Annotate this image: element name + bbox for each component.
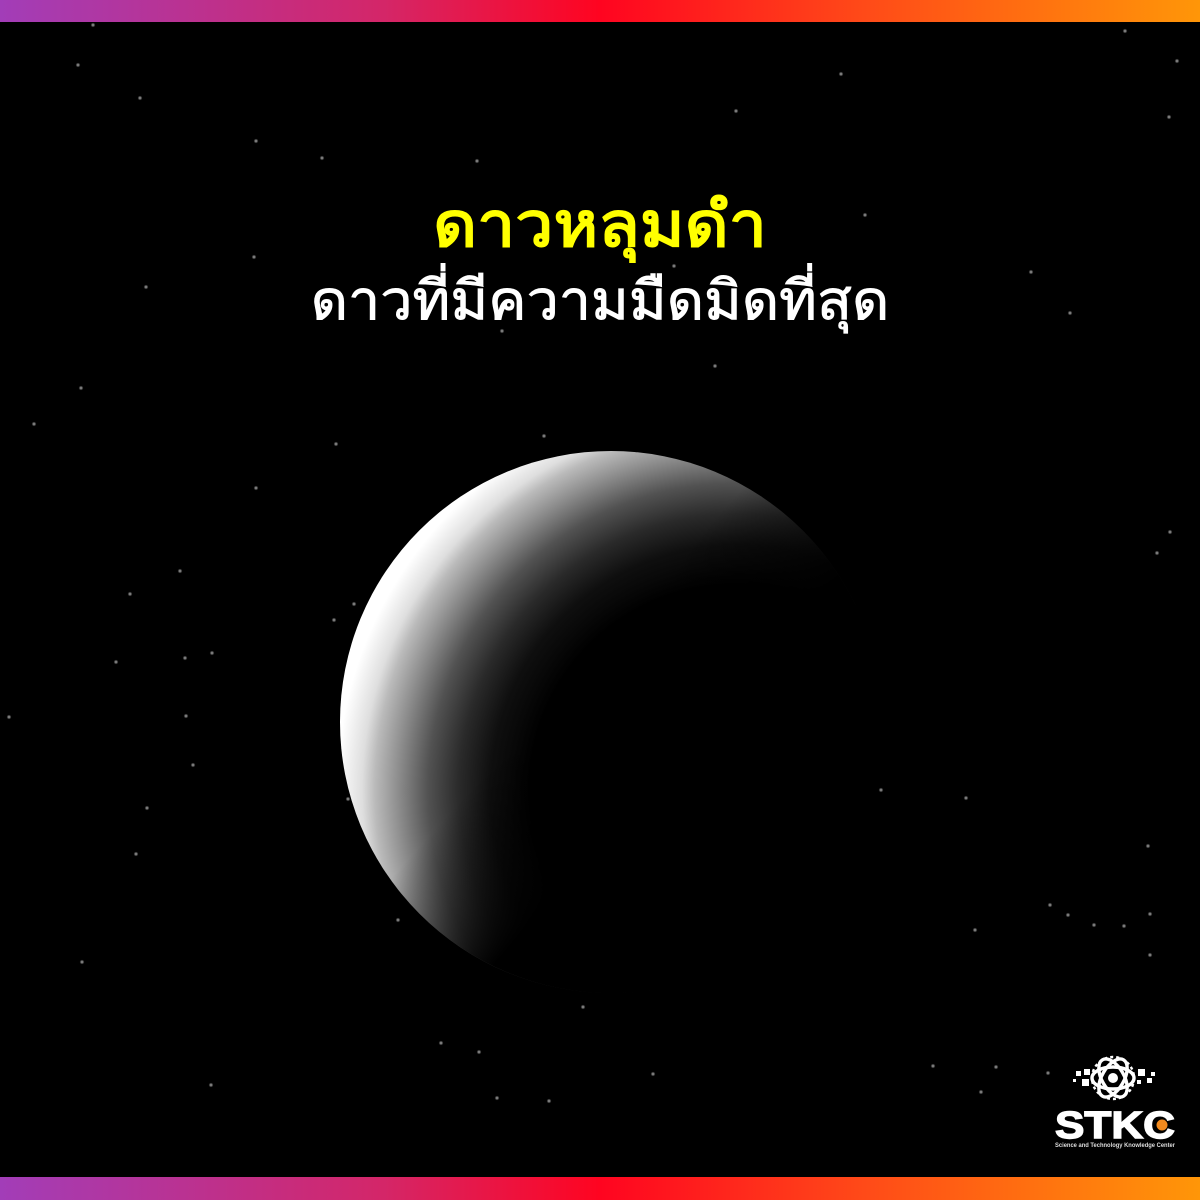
logo wordmark: STKC — [1055, 1105, 1175, 1147]
logo: STKC — [1055, 1054, 1176, 1149]
logo icon: atom mark — [1073, 1054, 1155, 1102]
top gradient bar — [0, 0, 1200, 22]
logo orange dot — [1156, 1120, 1168, 1130]
logo tagline: Science and Technology Knowledge Center — [1055, 1143, 1176, 1149]
bottom gradient bar — [0, 1177, 1200, 1200]
title: ดาวหลุมดำ — [433, 191, 767, 260]
subtitle: ดาวที่มีความมืดมิดที่สุด — [311, 271, 889, 331]
planet: black hole crescent — [340, 451, 882, 993]
